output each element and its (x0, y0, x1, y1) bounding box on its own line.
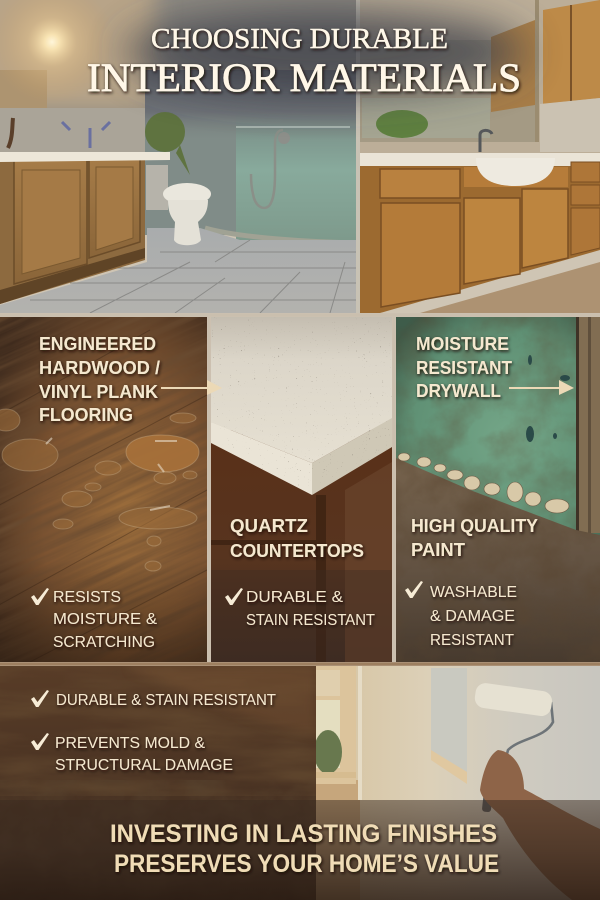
left vanity (0, 158, 145, 304)
bottom shade (0, 574, 207, 662)
heading: flooring: VINYL PLANK (39, 382, 158, 402)
sink (476, 158, 555, 186)
panel: flooring (0, 317, 207, 662)
benefit: quartz: STAIN RESISTANT (246, 612, 375, 629)
panel: dark stone band (0, 666, 316, 900)
right mirror (360, 0, 539, 142)
plant (145, 112, 190, 175)
heading: quartz: QUARTZ (230, 516, 308, 536)
wood grain (0, 317, 207, 662)
closing statement: INVESTING IN LASTING FINISHES (110, 820, 497, 848)
cabinet (211, 430, 392, 662)
check: bottom one (31, 690, 49, 707)
door panel (431, 668, 467, 776)
heading: flooring: FLOORING (39, 405, 133, 425)
heading: quartz: COUNTERTOPS (230, 541, 364, 561)
right vanity (360, 162, 600, 313)
panel: bathroom photo right (356, 0, 600, 313)
heading: drywall: MOISTURE (416, 334, 509, 354)
benefit: paint: WASHABLE (430, 584, 517, 601)
heading: quartz (230, 516, 364, 561)
drywall marks (526, 355, 570, 442)
heading: flooring: ENGINEERED (39, 334, 156, 354)
benefit: quartz: DURABLE & (246, 589, 343, 606)
benefit: flooring: MOISTURE & (53, 611, 157, 628)
panel: quartz countertop (211, 317, 392, 662)
water highlights (46, 438, 177, 510)
closing statement (110, 820, 499, 878)
heading: paint: HIGH QUALITY (411, 516, 538, 536)
panel dividers (0, 315, 600, 662)
window (314, 666, 362, 800)
heading: flooring: HARDWOOD / (39, 358, 160, 378)
closing statement: PRESERVES YOUR HOME’S VALUE (114, 850, 499, 878)
water droplets (0, 409, 199, 571)
title wash (125, 10, 525, 94)
plank seams (0, 330, 207, 662)
title line 1: CHOOSING DURABLE (151, 24, 448, 55)
benefit: durable: DURABLE & STAIN RESISTANT (56, 692, 276, 709)
benefit: mold: STRUCTURAL DAMAGE (55, 757, 233, 774)
tile floor (0, 228, 358, 313)
heading: drywall: RESISTANT (416, 358, 512, 378)
benefit: mold: PREVENTS MOLD & (55, 735, 205, 752)
heading: drywall (416, 334, 512, 401)
lamp glow (8, 0, 95, 88)
speckle (211, 317, 392, 497)
title (87, 24, 521, 100)
panel: bathroom photo left (0, 0, 360, 313)
heading: paint: PAINT (411, 540, 465, 560)
counter top (211, 317, 392, 463)
benefit: paint: & DAMAGE (430, 608, 515, 625)
benefit: flooring: RESISTS (53, 589, 121, 606)
right counter (360, 153, 600, 166)
stones (398, 453, 569, 513)
benefit: paint (430, 584, 517, 649)
counter left face (211, 422, 312, 495)
faucets (8, 118, 110, 148)
panel: painting photo (314, 666, 600, 900)
right floor (420, 262, 600, 313)
backsplash (540, 98, 600, 152)
stud frame (576, 317, 600, 533)
divider strip (356, 0, 360, 313)
counter right face (312, 430, 392, 495)
heading: paint (411, 516, 538, 560)
left counter (0, 152, 170, 162)
check: paint (405, 581, 423, 598)
green drywall (396, 317, 600, 537)
right bathroom wall (360, 0, 600, 155)
check: quartz (225, 588, 243, 605)
benefit: mold (55, 735, 233, 774)
heading: drywall: DRYWALL (416, 381, 501, 401)
check: flooring (31, 588, 49, 605)
arm and hand (480, 750, 600, 900)
wall cabinet (543, 0, 600, 104)
roller (474, 682, 553, 812)
arrow: drywall (509, 380, 574, 395)
left wall (0, 0, 360, 160)
panel: bottom banner (0, 800, 600, 900)
check: bottom two (31, 733, 49, 750)
toilet (146, 165, 211, 245)
heading: flooring (39, 334, 160, 425)
title line 2: INTERIOR MATERIALS (87, 55, 521, 100)
benefit: quartz (246, 589, 375, 629)
shower enclosure (145, 70, 360, 243)
benefit: flooring: SCRATCHING (53, 634, 155, 651)
plaster lower wall (396, 458, 600, 662)
benefit: flooring (53, 589, 157, 651)
faucet (480, 130, 492, 152)
lower wall (316, 780, 360, 900)
arrow: flooring (161, 380, 222, 395)
benefit: paint: RESISTANT (430, 632, 514, 649)
panel: drywall and paint (396, 317, 600, 662)
